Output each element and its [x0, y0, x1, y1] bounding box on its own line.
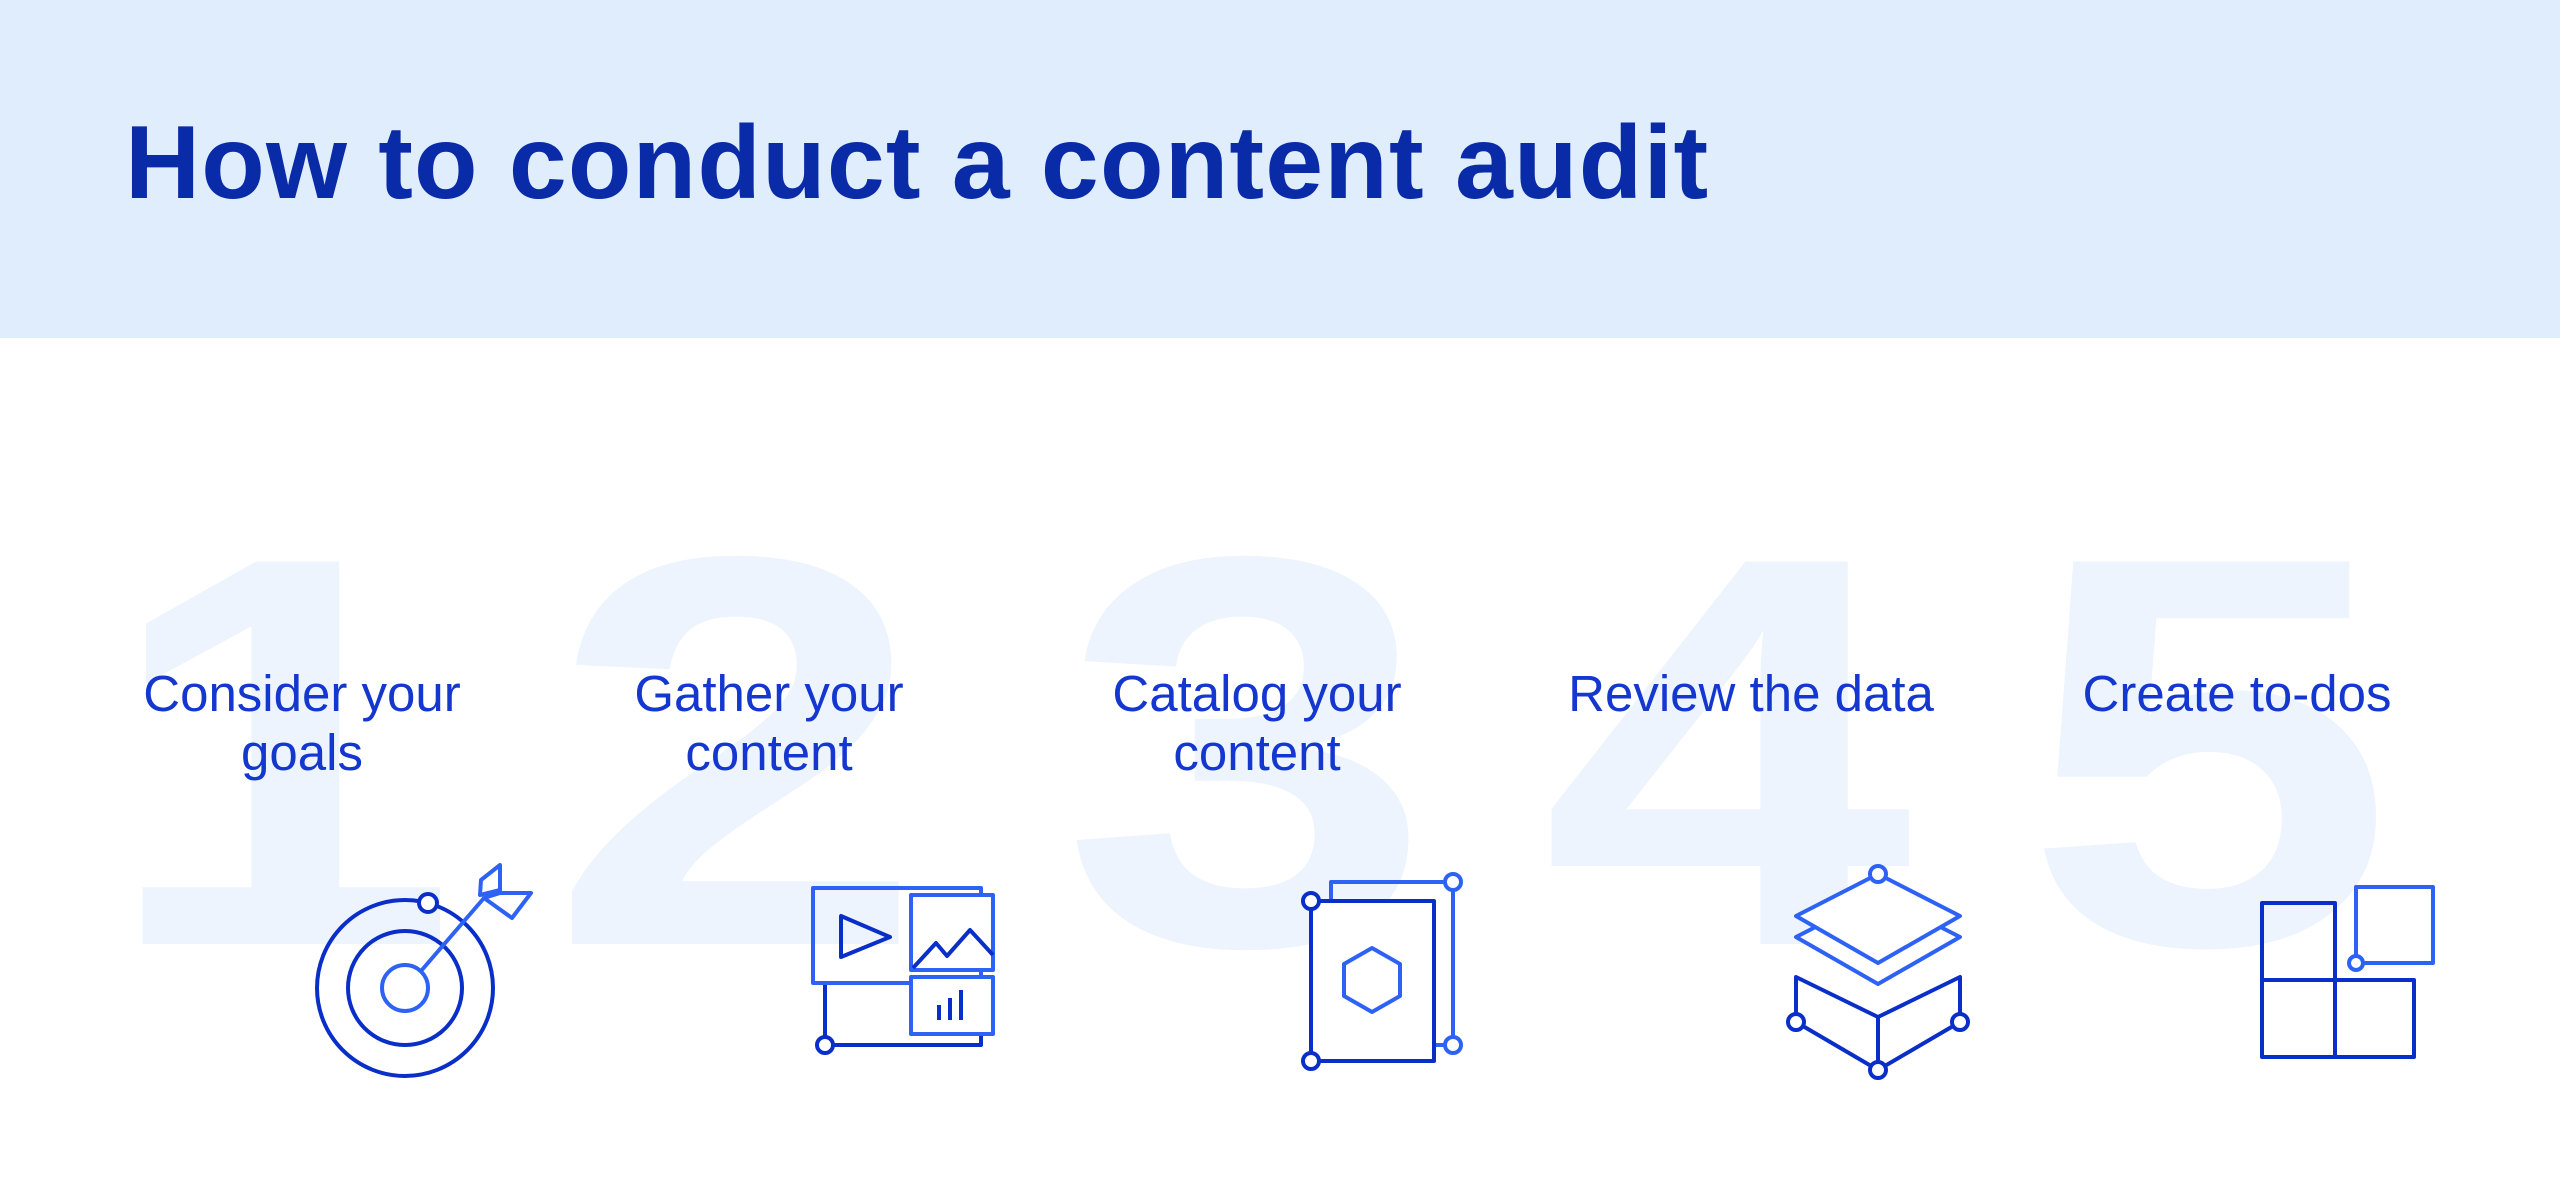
label: step 3 — [1112, 665, 1402, 781]
big background numbers: 2 — [548, 442, 926, 1062]
icon: catalog document — [1303, 874, 1461, 1069]
label: step 4: Review the data — [1568, 665, 1934, 722]
label: step 1 — [143, 665, 461, 781]
icon: media content — [813, 888, 993, 1053]
title: How to conduct a content audit — [125, 105, 1709, 221]
label: step 1: goals — [241, 724, 363, 781]
label: step 5: Create to-dos — [2082, 665, 2392, 722]
icon: to-do blocks — [2262, 887, 2433, 1057]
header band — [0, 0, 2560, 338]
label: step 2: Gather your — [634, 665, 904, 722]
icon: target — [317, 865, 531, 1076]
label: step 3: Catalog your — [1112, 665, 1402, 722]
big background numbers: 5 — [2023, 442, 2395, 1063]
label: step 2: content — [685, 724, 853, 781]
icon: layered cube — [1788, 866, 1968, 1078]
big background numbers: 1 — [102, 441, 458, 1062]
label: step 3: content — [1173, 724, 1341, 781]
big background numbers: 4 — [1541, 442, 1917, 1063]
label: step 2 — [634, 665, 904, 781]
big background numbers: 3 — [1061, 442, 1433, 1063]
label: step 1: Consider your — [143, 665, 461, 722]
